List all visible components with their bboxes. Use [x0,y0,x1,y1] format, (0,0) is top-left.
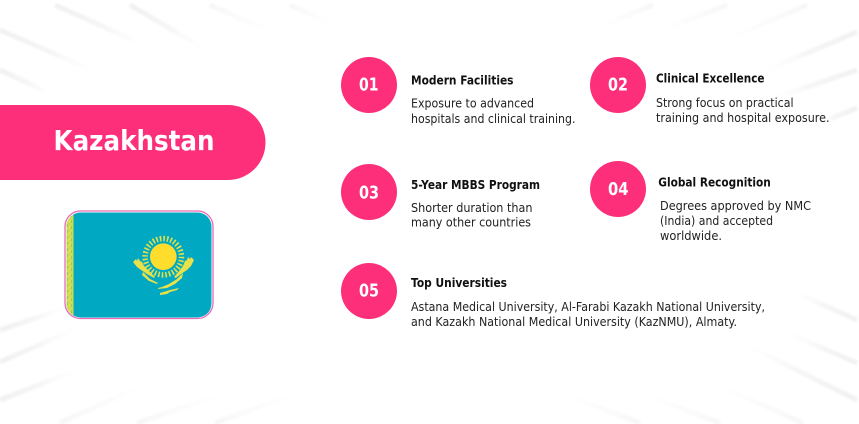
number badge 05 [341,263,397,319]
heading 02: Clinical Excellence [656,71,764,86]
description 04 [660,198,811,243]
number badge 03 [341,164,397,220]
description 01: Exposure to advanced [411,96,534,111]
description 03: Shorter duration than [411,200,532,215]
flag sun [145,239,182,275]
description 03 [411,200,532,230]
description 05: and Kazakh National Medical University (KazNMU), Almaty. [411,314,737,329]
number badge 02 [590,57,646,113]
number badge 04: 04 [608,180,628,200]
description 05 [411,299,765,329]
description 03: many other countries [411,215,531,230]
description 02: Strong focus on practical [656,95,794,110]
number badge 03: 03 [359,184,379,204]
banner title text: Kazakhstan [54,125,214,157]
flag eagle [133,257,194,295]
description 04: (India) and accepted [660,213,773,228]
description 02 [656,95,830,125]
item 02 [590,57,830,125]
description 01 [411,96,576,126]
number badge 02: 02 [608,76,628,96]
description 01: hospitals and clinical training. [411,111,576,126]
description 04: Degrees approved by NMC [660,198,811,213]
heading 04: Global Recognition [658,175,771,190]
item 04 [590,161,811,243]
description 05: Astana Medical University, Al-Farabi Kazakh National University, [411,299,765,314]
description 02: training and hospital exposure. [656,110,830,125]
description 04: worldwide. [660,228,722,243]
flag ornament band [66,214,74,316]
title banner [0,105,266,180]
heading 01: Modern Facilities [411,73,514,88]
heading 05: Top Universities [411,275,507,290]
number badge 05: 05 [359,282,379,302]
heading 03: 5-Year MBBS Program [411,177,540,192]
item 03 [341,164,540,230]
item 05 [341,263,765,329]
number badge 04 [590,161,646,217]
item 01 [341,57,576,126]
number badge 01 [341,57,397,113]
flag of Kazakhstan [65,211,213,319]
number badge 01: 01 [359,76,378,96]
